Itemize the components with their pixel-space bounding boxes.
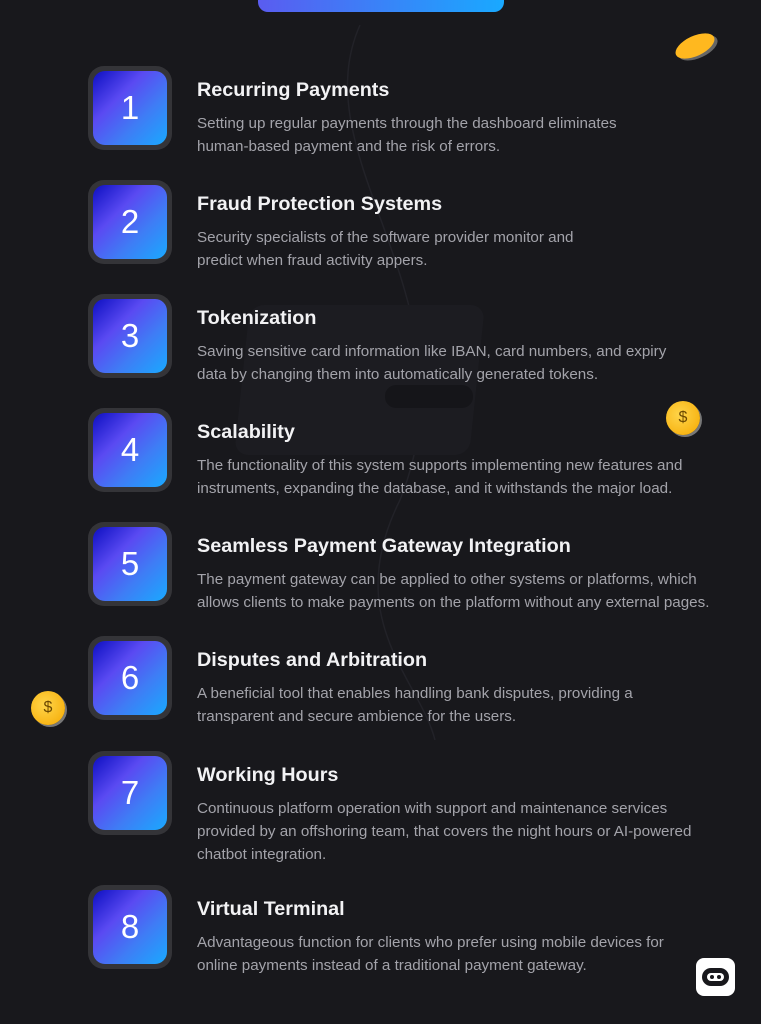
item 1: Setting up regular payments through the dashboard eliminates [197, 115, 617, 132]
item 5: The payment gateway can be applied to other systems or platforms, which [197, 571, 697, 588]
item 2 [88, 180, 573, 269]
item 8: Virtual Terminal [197, 898, 345, 920]
coin: right: $ [679, 409, 687, 426]
coin: left [31, 691, 65, 725]
item 4: 4 [121, 431, 139, 468]
item 1: Recurring Payments [197, 79, 389, 101]
item 8: Advantageous function for clients who prefer using mobile devices for [197, 934, 664, 951]
item 6: Disputes and Arbitration [197, 649, 427, 671]
item 2: Fraud Protection Systems [197, 193, 442, 215]
item 7: provided by an offshoring team, that covers the night hours or AI-powered [197, 823, 691, 840]
item 4 [88, 408, 682, 497]
item 4: Scalability [197, 421, 295, 443]
item 3: data by changing them into automatically generated tokens. [197, 366, 598, 383]
item 7: 7 [121, 774, 139, 811]
item 7: Continuous platform operation with support and maintenance services [197, 800, 667, 817]
item 2: 2 [121, 203, 139, 240]
item 3: 3 [121, 317, 139, 354]
item 5: allows clients to make payments on the platform without any external pages. [197, 594, 709, 611]
item 1 [88, 66, 617, 155]
coin: right [666, 401, 700, 435]
item 6: transparent and secure ambience for the users. [197, 708, 516, 725]
coin: left: $ [44, 699, 52, 716]
item 7: Working Hours [197, 764, 338, 786]
item 1: human-based payment and the risk of errors. [197, 138, 500, 155]
item 3 [88, 294, 666, 383]
item 6: 6 [121, 659, 139, 696]
item 5: 5 [121, 545, 139, 582]
item 8: 8 [121, 908, 139, 945]
item 3: Saving sensitive card information like IBAN, card numbers, and expiry [197, 343, 666, 360]
item 8: online payments instead of a traditional payment gateway. [197, 957, 587, 974]
item 7 [88, 751, 691, 863]
item 2: Security specialists of the software provider monitor and [197, 229, 573, 246]
item 6 [88, 636, 633, 725]
item 4: The functionality of this system supports implementing new features and [197, 457, 682, 474]
item 5: Seamless Payment Gateway Integration [197, 535, 571, 557]
coin: tilted top right [672, 28, 718, 64]
logo icon [696, 958, 735, 996]
item 6: A beneficial tool that enables handling bank disputes, providing a [197, 685, 633, 702]
item 7: chatbot integration. [197, 846, 326, 863]
item 1: 1 [121, 89, 139, 126]
item 5 [88, 522, 709, 611]
item 2: predict when fraud activity appers. [197, 252, 427, 269]
item 4: instruments, expanding the database, and it withstands the major load. [197, 480, 672, 497]
top gradient bar [258, 0, 504, 12]
item 3: Tokenization [197, 307, 316, 329]
item 8 [88, 885, 664, 974]
